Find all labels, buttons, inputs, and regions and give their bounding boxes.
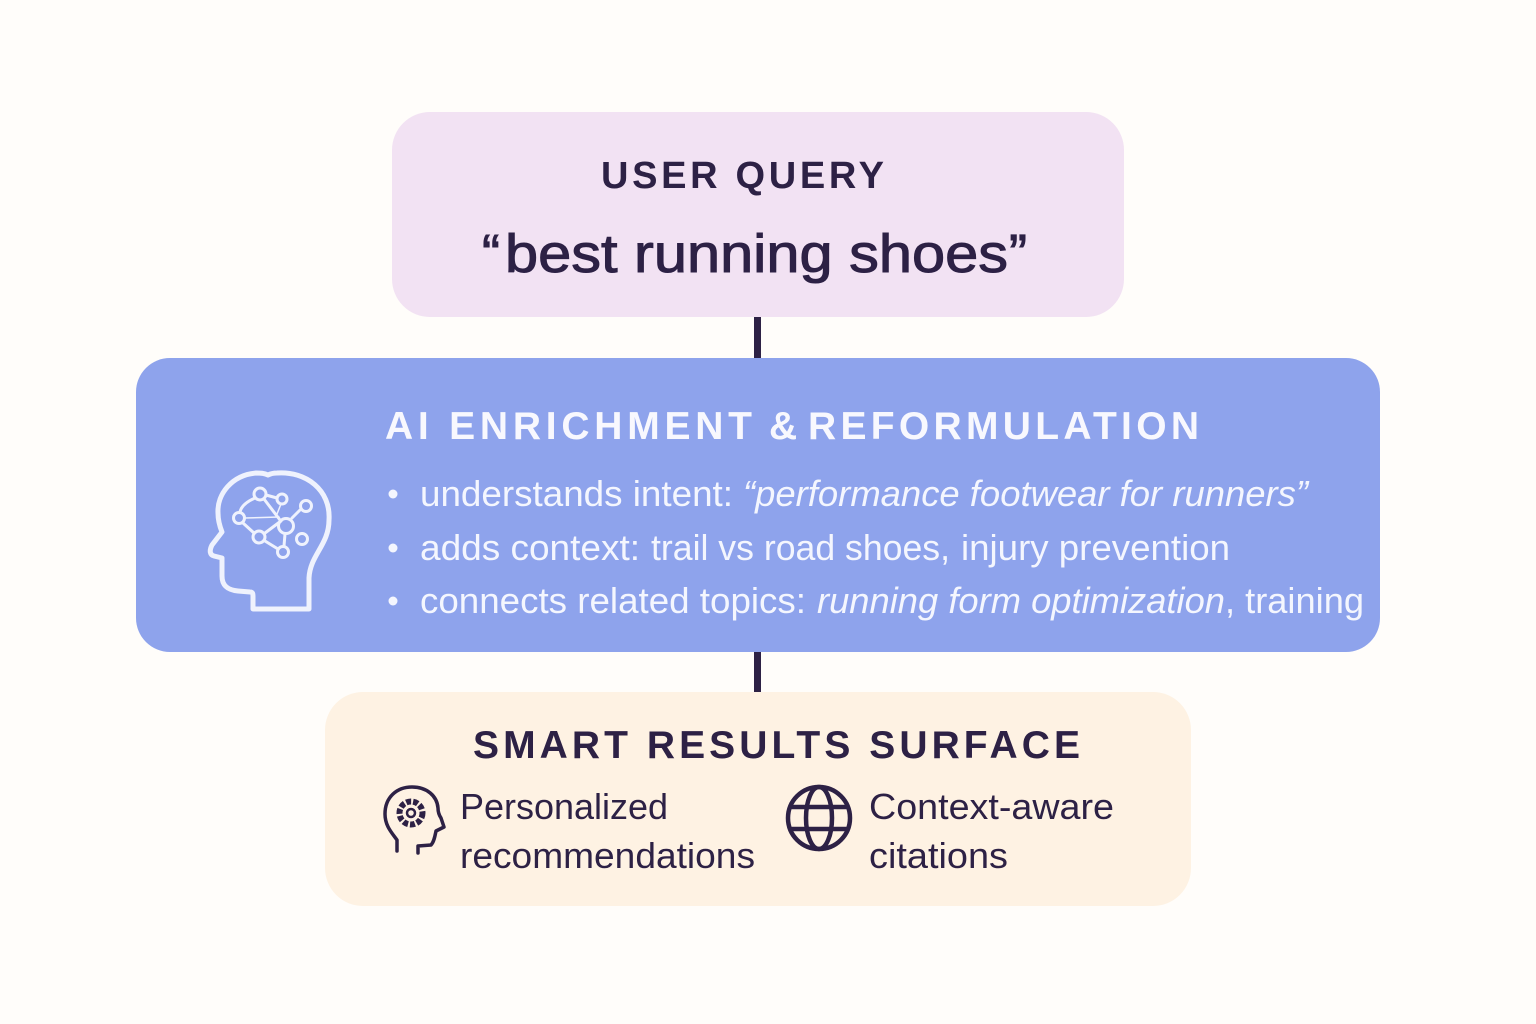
query text: best running shoes <box>505 224 1008 284</box>
bullet 2: injury prevention <box>961 527 1230 568</box>
bullet 2: adds context: <box>420 527 640 568</box>
panel: user query <box>392 112 1124 317</box>
label: personalized: Personalized <box>460 786 668 827</box>
panel: AI enrichment <box>136 358 1380 652</box>
bullet 3: connects related topics: <box>420 580 806 621</box>
bullet 3: running form optimization <box>817 580 1225 621</box>
bullet 2: trail vs road shoes, <box>651 527 950 568</box>
query text: ” <box>1009 224 1027 284</box>
label: personalized <box>460 786 755 876</box>
bullet 1: understands intent: <box>420 473 733 514</box>
arrow: connector from enrichment to results <box>754 650 761 694</box>
bullet 3: , training <box>1225 580 1364 621</box>
bullet 3 <box>388 580 1364 621</box>
arrow: connector from query to enrichment <box>754 316 761 360</box>
icon: head with gear <box>385 787 444 853</box>
heading: AI enrichment: AI ENRICHMENT <box>385 405 752 448</box>
label: personalized: recommendations <box>460 835 755 876</box>
label: context-aware: citations <box>869 835 1008 876</box>
label: context-aware <box>869 786 1114 876</box>
icon: brain network head <box>210 473 329 609</box>
bullet 1: “performance footwear for runners” <box>743 473 1310 514</box>
heading: AI enrichment <box>385 405 1199 448</box>
heading: smart results: SMART RESULTS SURFACE <box>473 724 1080 767</box>
label: context-aware: Context-aware <box>869 786 1114 827</box>
heading: user query: USER QUERY <box>601 155 884 197</box>
query text: “ <box>482 224 500 284</box>
panel: smart results <box>325 692 1191 906</box>
bullet list <box>388 473 1364 621</box>
icon: globe <box>788 787 850 849</box>
heading: AI enrichment: & <box>769 405 797 448</box>
heading: AI enrichment: REFORMULATION <box>808 405 1199 448</box>
bullet 2 <box>388 527 1230 568</box>
bullet 1 <box>388 473 1310 514</box>
